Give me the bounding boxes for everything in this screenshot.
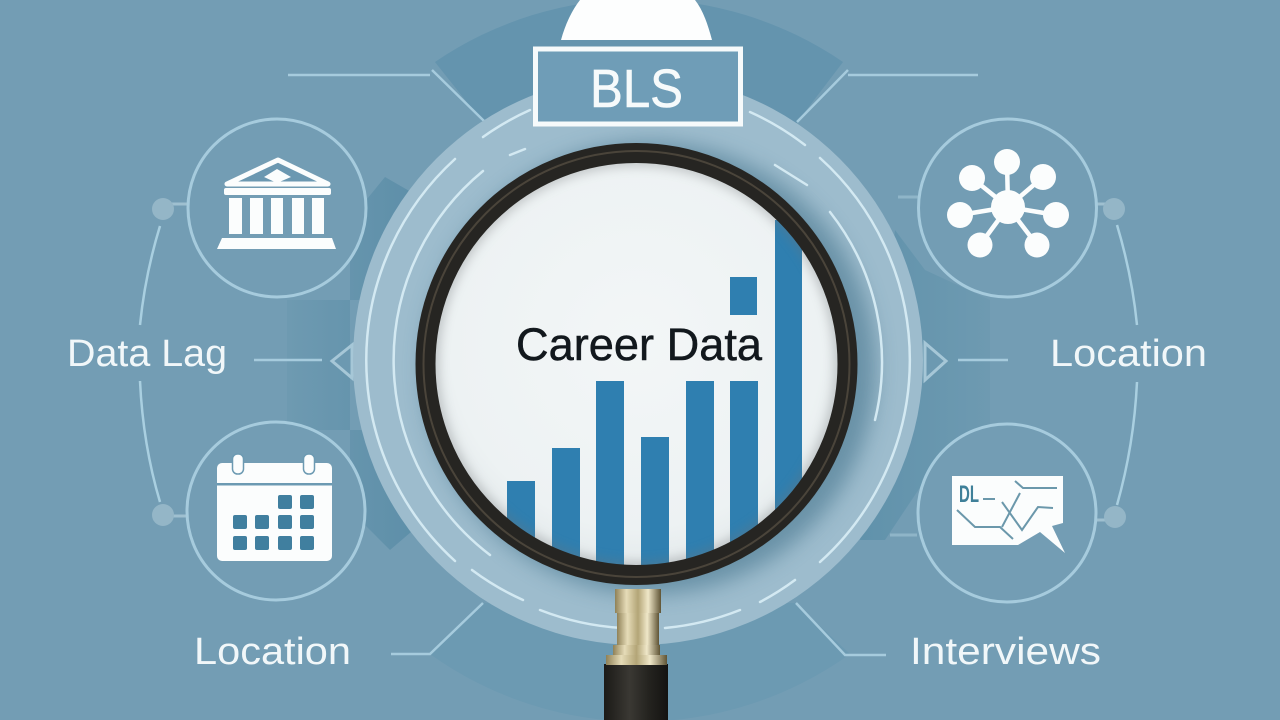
left timeline arcs and nodes [140,198,187,526]
lens title: Career Data [516,319,763,370]
decorative ring triangle: right [925,343,946,380]
connector: top left [288,70,485,122]
central light ring [353,75,923,645]
icon: report speech bubble [952,476,1065,553]
label: Location bottom left: Location [194,631,351,673]
connector: bottom right [796,603,886,655]
lens edge shading [432,160,840,568]
lens frame [426,153,848,575]
icon: bank building [217,160,336,249]
dome above BLS box [561,0,712,40]
icon panel: calendar [187,422,365,600]
connector: middle left [254,359,322,361]
bar chart [507,220,802,591]
ring arc lines [366,110,910,628]
label: Data Lag: Data Lag [67,333,227,375]
connector: top right [797,70,978,122]
icon panel: report [918,424,1096,602]
icon: network nodes [947,149,1069,258]
label: Location right: Location [1050,333,1207,375]
brass collar [606,589,667,665]
connector: bottom left [391,603,483,654]
right timeline arcs and nodes [890,197,1137,535]
magnifying glass handle [604,589,668,720]
label: Interviews: Interviews [910,631,1101,673]
magnifying glass lens [424,151,850,591]
dark backdrop behind central ring [287,0,990,720]
BLS label box: BLS [590,59,683,119]
decorative ring triangle: left [332,345,352,378]
connector: middle right [958,359,1008,361]
icon: report speech bubble: DL [959,481,979,508]
icon panel: network [918,119,1096,297]
icon: calendar [217,454,332,561]
BLS label box [536,49,740,124]
icon panel: institution [188,119,366,297]
